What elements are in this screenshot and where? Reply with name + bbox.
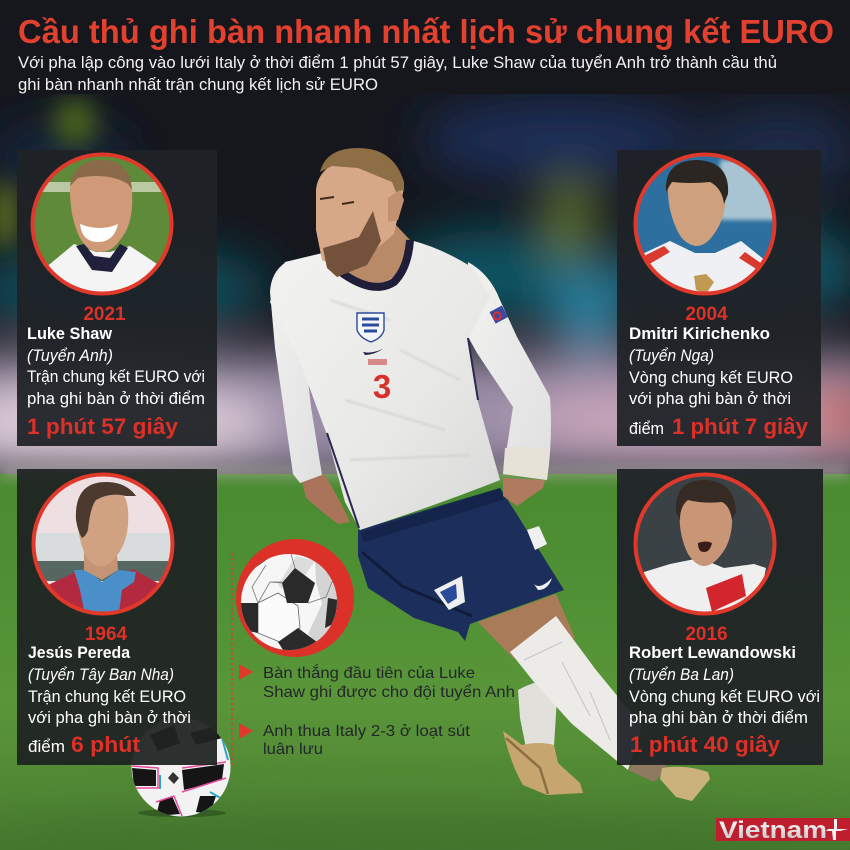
stadium background — [0, 94, 850, 494]
panel text: (Tuyển Anh) — [27, 346, 113, 365]
panel text: 1 phút 40 giây — [630, 732, 781, 757]
panel text: điểm — [629, 419, 664, 438]
near leg, sock and boot — [478, 594, 710, 801]
Euro match ball — [132, 718, 230, 817]
right hand — [503, 478, 545, 506]
grass pitch — [0, 466, 850, 850]
UEFA sleeve patch — [490, 306, 508, 324]
panel text: Robert Lewandowski — [629, 644, 796, 662]
panel: Robert Lewandowski 2016 — [617, 469, 823, 765]
shirt torso — [270, 240, 500, 530]
logo: Vietnam+ — [716, 817, 850, 844]
badge: England crest — [357, 313, 387, 365]
bullet: match result: luân lưu — [263, 741, 323, 758]
panel text: 2021 — [83, 304, 126, 325]
panel: Luke Shaw 2021 — [17, 150, 217, 446]
panel text: Dmitri Kirichenko — [629, 325, 770, 343]
panel text — [629, 304, 809, 439]
panel text: với pha ghi bàn ở thời — [629, 389, 791, 408]
panel text: Luke Shaw — [27, 325, 112, 343]
bullet: match result — [239, 723, 471, 758]
title: Cầu thủ ghi bàn nhanh nhất lịch sử chung kết EURO — [18, 13, 834, 50]
panel text: Jesús Pereda — [28, 644, 131, 662]
icon: football on red disc — [236, 539, 354, 657]
dotted timeline line — [231, 553, 233, 765]
panel text — [28, 624, 191, 757]
panel text: điểm — [28, 737, 65, 756]
logo: Vietnam+: Vietnam — [719, 817, 827, 844]
panel text: Trận chung kết EURO — [28, 687, 186, 706]
collar — [338, 240, 410, 287]
panel text: (Tuyển Tây Ban Nha) — [28, 665, 174, 684]
panel text — [27, 304, 205, 439]
bullet: first goal: Bàn thắng đầu tiên của Luke — [263, 663, 475, 682]
portrait: Jesús Pereda — [32, 472, 174, 616]
panel text: 2004 — [685, 304, 728, 325]
panel text: (Tuyển Ba Lan) — [629, 665, 734, 684]
left hand — [302, 474, 350, 524]
panel text: pha ghi bàn ở thời điểm — [629, 708, 808, 727]
header band — [0, 0, 850, 94]
panel text: pha ghi bàn ở thời điểm — [27, 389, 205, 408]
far leg and boot — [503, 678, 583, 795]
subtitle: ghi bàn nhanh nhất trận chung kết lịch sử EURO — [18, 75, 378, 94]
bullet: match result: Anh thua Italy 2-3 ở loạt sút — [263, 723, 471, 740]
panel: Dmitri Kirichenko 2004 — [617, 150, 821, 446]
forearm tape — [503, 446, 550, 480]
shirt number: 3 — [373, 368, 391, 405]
panel text: Vòng chung kết EURO với — [629, 687, 820, 706]
right arm — [467, 262, 551, 480]
subtitle: Với pha lập công vào lưới Italy ở thời điểm 1 phút 57 giây, Luke Shaw của tuyển Anh trở thành cầu thủ — [18, 53, 777, 72]
shorts — [358, 488, 564, 641]
portrait: Dmitri Kirichenko — [634, 152, 776, 296]
subtitle — [18, 53, 777, 94]
panel text: 1 phút 57 giây — [27, 414, 179, 439]
panel text: (Tuyển Nga) — [629, 346, 714, 365]
head — [316, 148, 404, 277]
bullet: first goal — [239, 663, 515, 701]
panel text: Vòng chung kết EURO — [629, 368, 793, 387]
neck — [340, 224, 410, 283]
panel text: 1964 — [85, 624, 128, 645]
panel text: với pha ghi bàn ở thời — [28, 708, 191, 727]
portrait: Luke Shaw — [30, 150, 180, 300]
panel text: 2016 — [685, 624, 728, 645]
panel text — [629, 624, 820, 757]
panel: Jesús Pereda 1964 — [17, 469, 217, 765]
left arm — [270, 262, 322, 483]
panel text: 6 phút — [71, 732, 141, 757]
bullet: first goal: Shaw ghi được cho đội tuyển Anh — [263, 683, 515, 701]
panel text: Trận chung kết EURO với — [27, 367, 205, 386]
portrait: Robert Lewandowski — [630, 470, 780, 620]
main player: Luke Shaw — [270, 148, 710, 801]
panel text: 1 phút 7 giây — [672, 414, 809, 439]
